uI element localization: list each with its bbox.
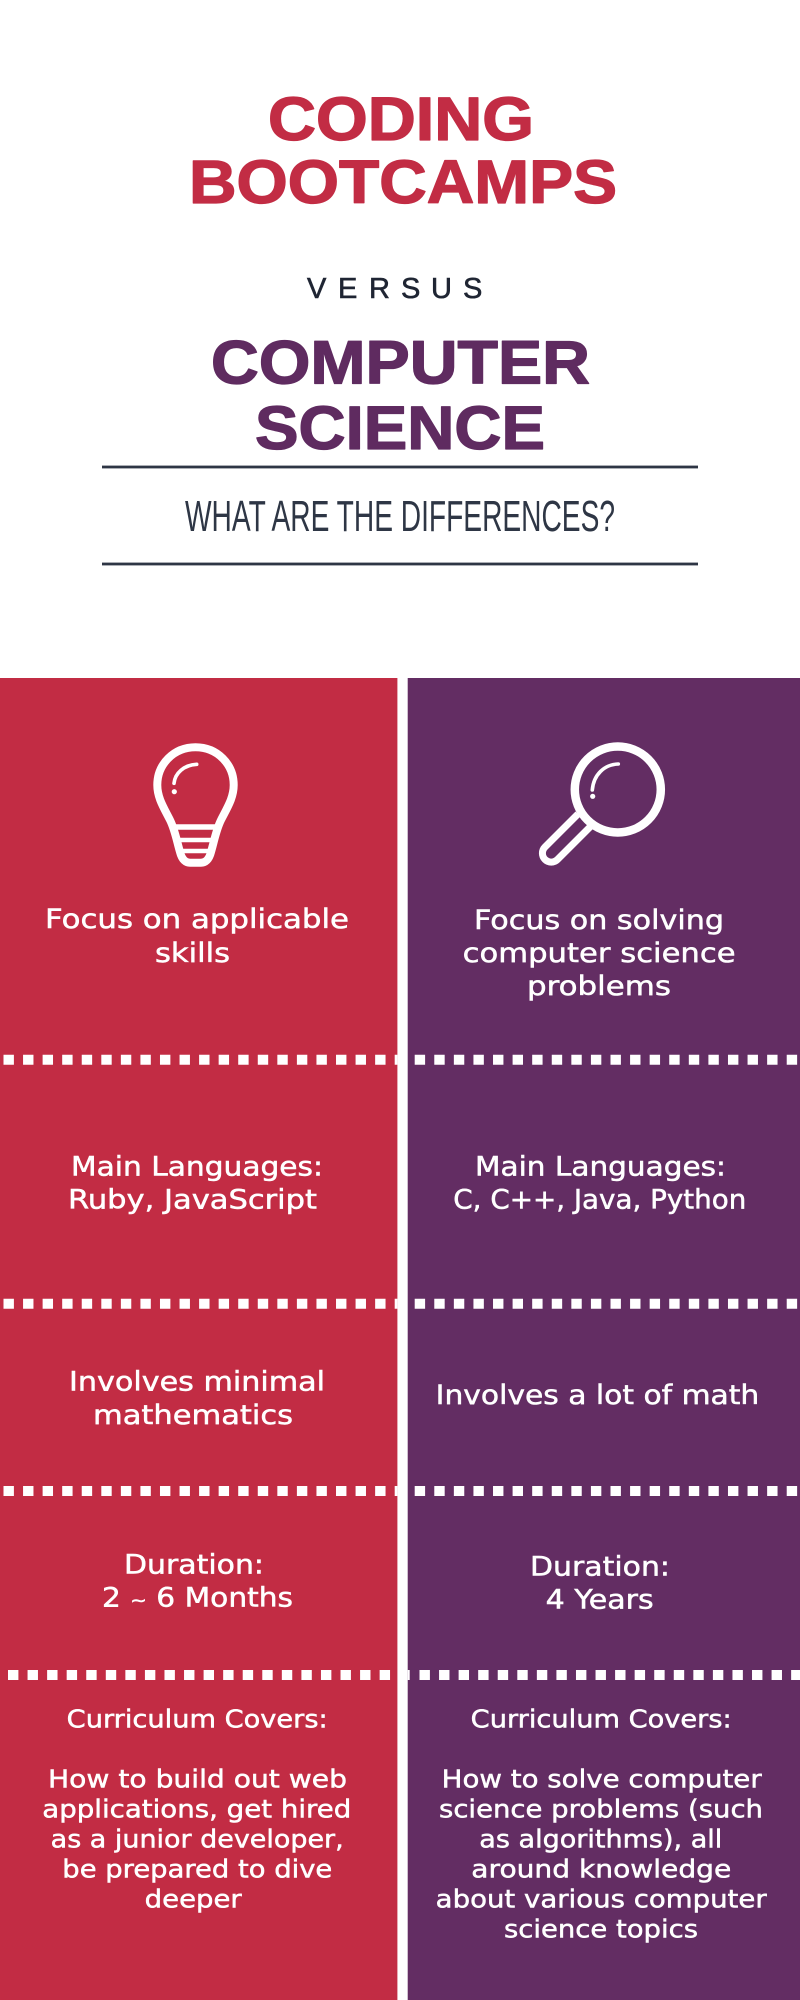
text: curriculum covers bootcamps: deeper: [145, 1885, 242, 1914]
text: involves a lot of math: Involves a lot of math: [436, 1380, 759, 1411]
text: curriculum covers bootcamps: Curriculum Covers:: [67, 1705, 328, 1734]
text: main languages ruby javascript: Ruby, JavaScript: [68, 1184, 317, 1215]
icon: lightbulb: [157, 747, 234, 863]
text: focus on solving computer science problems: problems: [527, 971, 671, 1002]
text: curriculum covers bootcamps: applications, get hired: [42, 1795, 351, 1824]
text: curriculum covers computer science: [436, 1705, 767, 1944]
heading: versus: VERSUS: [307, 273, 482, 305]
text: curriculum covers computer science: as algorithms), all: [479, 1825, 722, 1854]
text: involves minimal mathematics: mathematics: [93, 1400, 293, 1431]
text: curriculum covers computer science: How to solve computer: [442, 1765, 762, 1794]
text: main languages c c++ java python: Main Languages:: [475, 1151, 726, 1182]
header: [102, 85, 698, 565]
text: involves minimal mathematics: [69, 1367, 325, 1431]
text: focus on applicable skills: Focus on applicable: [45, 904, 349, 935]
text: duration 4 years: 4 Years: [546, 1584, 654, 1616]
title: computer science: SCIENCE: [255, 394, 545, 462]
text: main languages ruby javascript: Main Languages:: [71, 1151, 323, 1182]
text: curriculum covers computer science: about various computer: [436, 1885, 767, 1914]
text: duration 4 years: Duration:: [530, 1552, 670, 1582]
text: curriculum covers bootcamps: as a junior developer,: [51, 1825, 344, 1854]
text: duration 4 years: [530, 1552, 670, 1616]
title: coding bootcamps: CODING: [268, 85, 534, 153]
panel: computer science column: [408, 678, 800, 2000]
title: computer science: [211, 328, 590, 462]
text: duration 2 to 6 months: [102, 1550, 293, 1614]
text: curriculum covers computer science: Curriculum Covers:: [471, 1705, 732, 1734]
text: curriculum covers bootcamps: How to build out web: [48, 1765, 347, 1794]
text: involves minimal mathematics: Involves minimal: [69, 1367, 325, 1398]
icon: magnifying glass: [542, 746, 661, 862]
text: duration 2 to 6 months: 2 ~ 6 Months: [102, 1582, 293, 1614]
text: curriculum covers bootcamps: [42, 1705, 351, 1914]
title: coding bootcamps: [189, 85, 617, 216]
text: curriculum covers computer science: science topics: [504, 1915, 698, 1944]
title: coding bootcamps: BOOTCAMPS: [189, 148, 617, 216]
text: focus on solving computer science problems: Focus on solving: [474, 905, 724, 936]
text: curriculum covers computer science: science problems (such: [439, 1795, 763, 1824]
text: curriculum covers computer science: around knowledge: [471, 1855, 731, 1884]
text: focus on applicable skills: [45, 904, 349, 969]
text: duration 2 to 6 months: Duration:: [124, 1550, 264, 1580]
text: main languages c c++ java python: [453, 1151, 746, 1215]
text: focus on applicable skills: skills: [155, 938, 230, 969]
panel: coding bootcamps column: [0, 678, 397, 2000]
text: main languages c c++ java python: C, C++, Java, Python: [453, 1184, 746, 1215]
title: computer science: COMPUTER: [211, 328, 590, 396]
text: main languages ruby javascript: [68, 1151, 323, 1215]
text: focus on solving computer science problems: [463, 905, 736, 1002]
text: focus on solving computer science problems: computer science: [463, 938, 736, 969]
text: curriculum covers bootcamps: be prepared to dive: [62, 1855, 332, 1884]
